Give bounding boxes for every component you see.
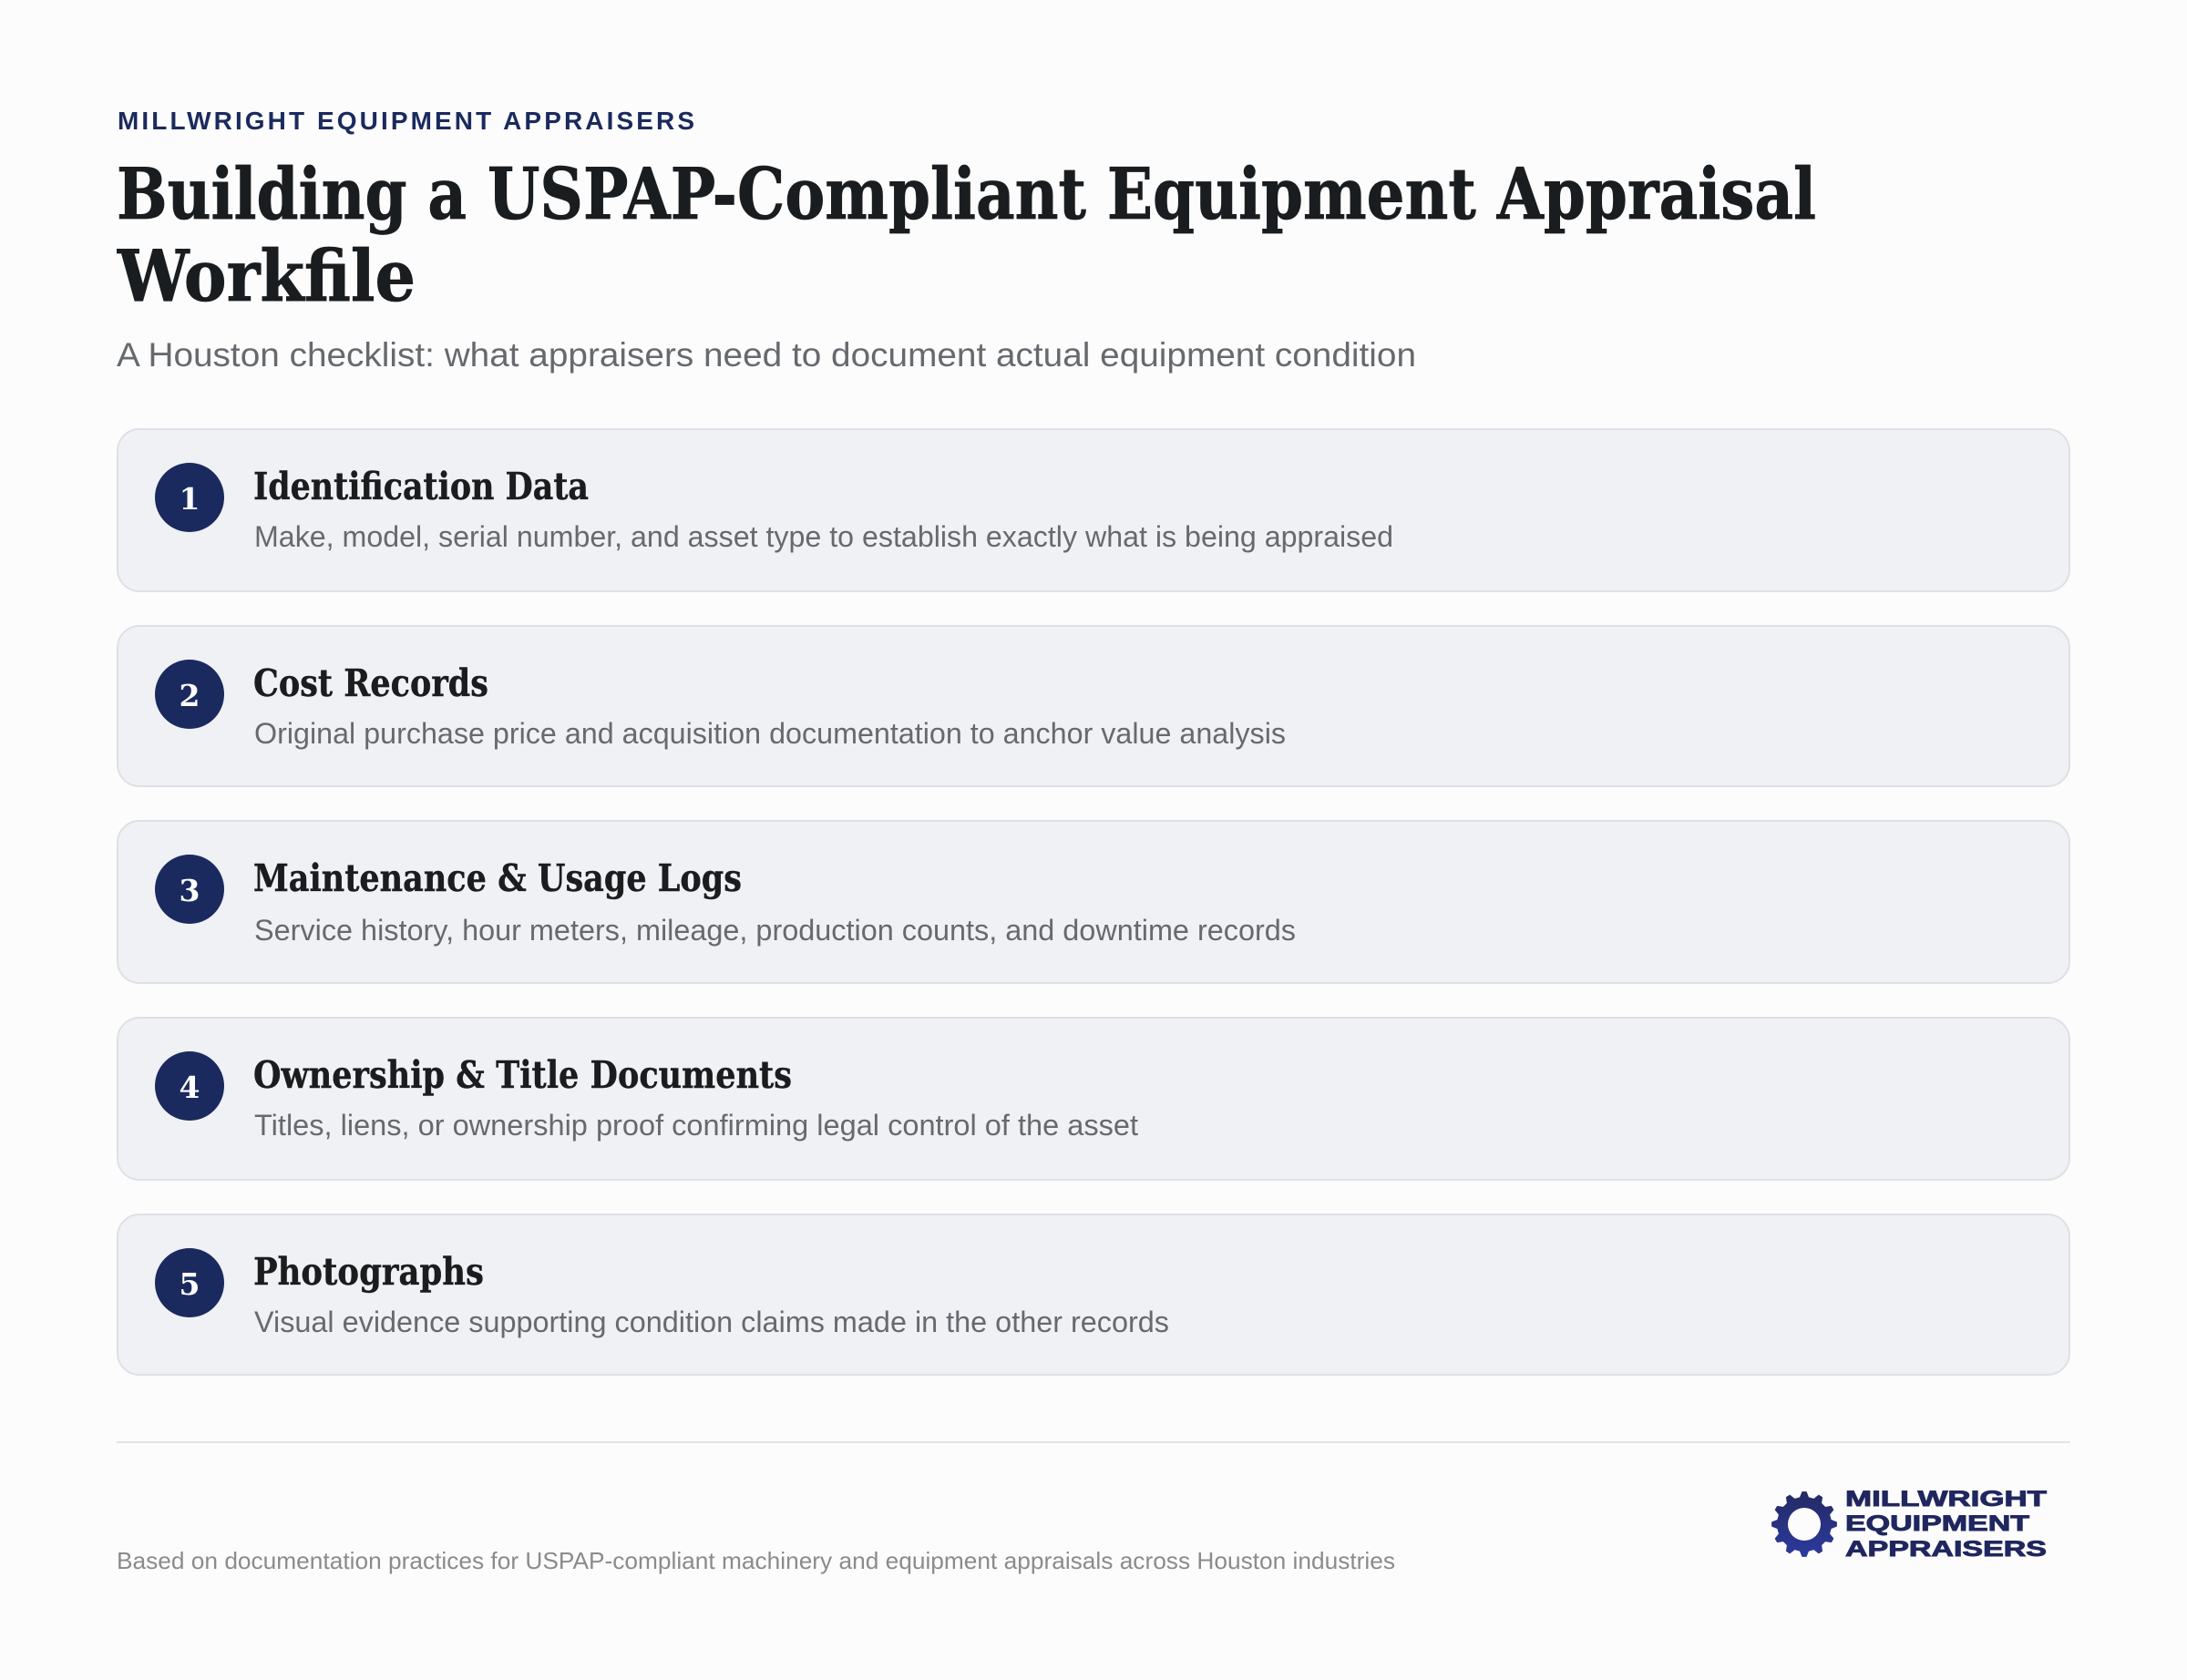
logo wordmark: APPRAISERS — [1845, 1537, 2047, 1562]
panel: step 5 photographs — [118, 1214, 2069, 1375]
number badge 4 — [155, 1051, 224, 1121]
step 2 heading: Cost Records — [253, 661, 488, 705]
logo wordmark: MILLWRIGHT — [1845, 1487, 2047, 1511]
subtitle: A Houston checklist: what appraisers need to document actual equipment condition — [117, 336, 1416, 374]
logo wordmark — [1845, 1487, 2047, 1562]
icon: gear — [1771, 1491, 1837, 1557]
step 4 heading: Ownership & Title Documents — [253, 1053, 792, 1097]
number badge 4: 4 — [180, 1070, 200, 1105]
step 3 description: Service history, hour meters, mileage, production counts, and downtime records — [254, 914, 1296, 947]
logo: Millwright Equipment Appraisers — [1771, 1487, 2047, 1562]
panel: step 1 identification data — [118, 429, 2069, 591]
step 2 description: Original purchase price and acquisition documentation to anchor value analysis — [254, 717, 1286, 750]
step 1 heading: Identification Data — [253, 465, 589, 508]
number badge 2: 2 — [180, 678, 200, 713]
number badge 1 — [155, 463, 224, 532]
card background 3 — [118, 821, 2069, 983]
panel: step 3 maintenance and usage logs — [118, 821, 2069, 983]
panel: step 2 cost records — [118, 626, 2069, 786]
number badge 5 — [155, 1248, 224, 1317]
logo wordmark: EQUIPMENT — [1845, 1511, 2029, 1536]
number badge 5: 5 — [180, 1266, 200, 1302]
footer source note: Based on documentation practices for USPAP-compliant machinery and equipment appraisals across Houston industries — [117, 1547, 1395, 1574]
eyebrow: company name: MILLWRIGHT EQUIPMENT APPRAISERS — [118, 107, 694, 135]
number badge 1: 1 — [180, 481, 200, 517]
number badge 2 — [155, 660, 224, 729]
number badge 3: 3 — [180, 873, 200, 908]
step 5 description: Visual evidence supporting condition claims made in the other records — [254, 1306, 1169, 1338]
card background 4 — [118, 1018, 2069, 1180]
panel: step 4 ownership and title documents — [118, 1018, 2069, 1180]
card background 2 — [118, 626, 2069, 786]
card background 5 — [118, 1214, 2069, 1375]
title: Workfile — [117, 235, 416, 318]
card background 1 — [118, 429, 2069, 591]
title: Building a USPAP-Compliant Equipment Appraisal — [117, 153, 1816, 236]
step 3 heading: Maintenance & Usage Logs — [253, 856, 742, 900]
number badge 3 — [155, 855, 224, 924]
step 5 heading: Photographs — [253, 1250, 484, 1294]
title — [117, 153, 1816, 318]
step 4 description: Titles, liens, or ownership proof confirming legal control of the asset — [254, 1109, 1138, 1142]
step 1 description: Make, model, serial number, and asset type to establish exactly what is being appraised — [254, 520, 1393, 553]
